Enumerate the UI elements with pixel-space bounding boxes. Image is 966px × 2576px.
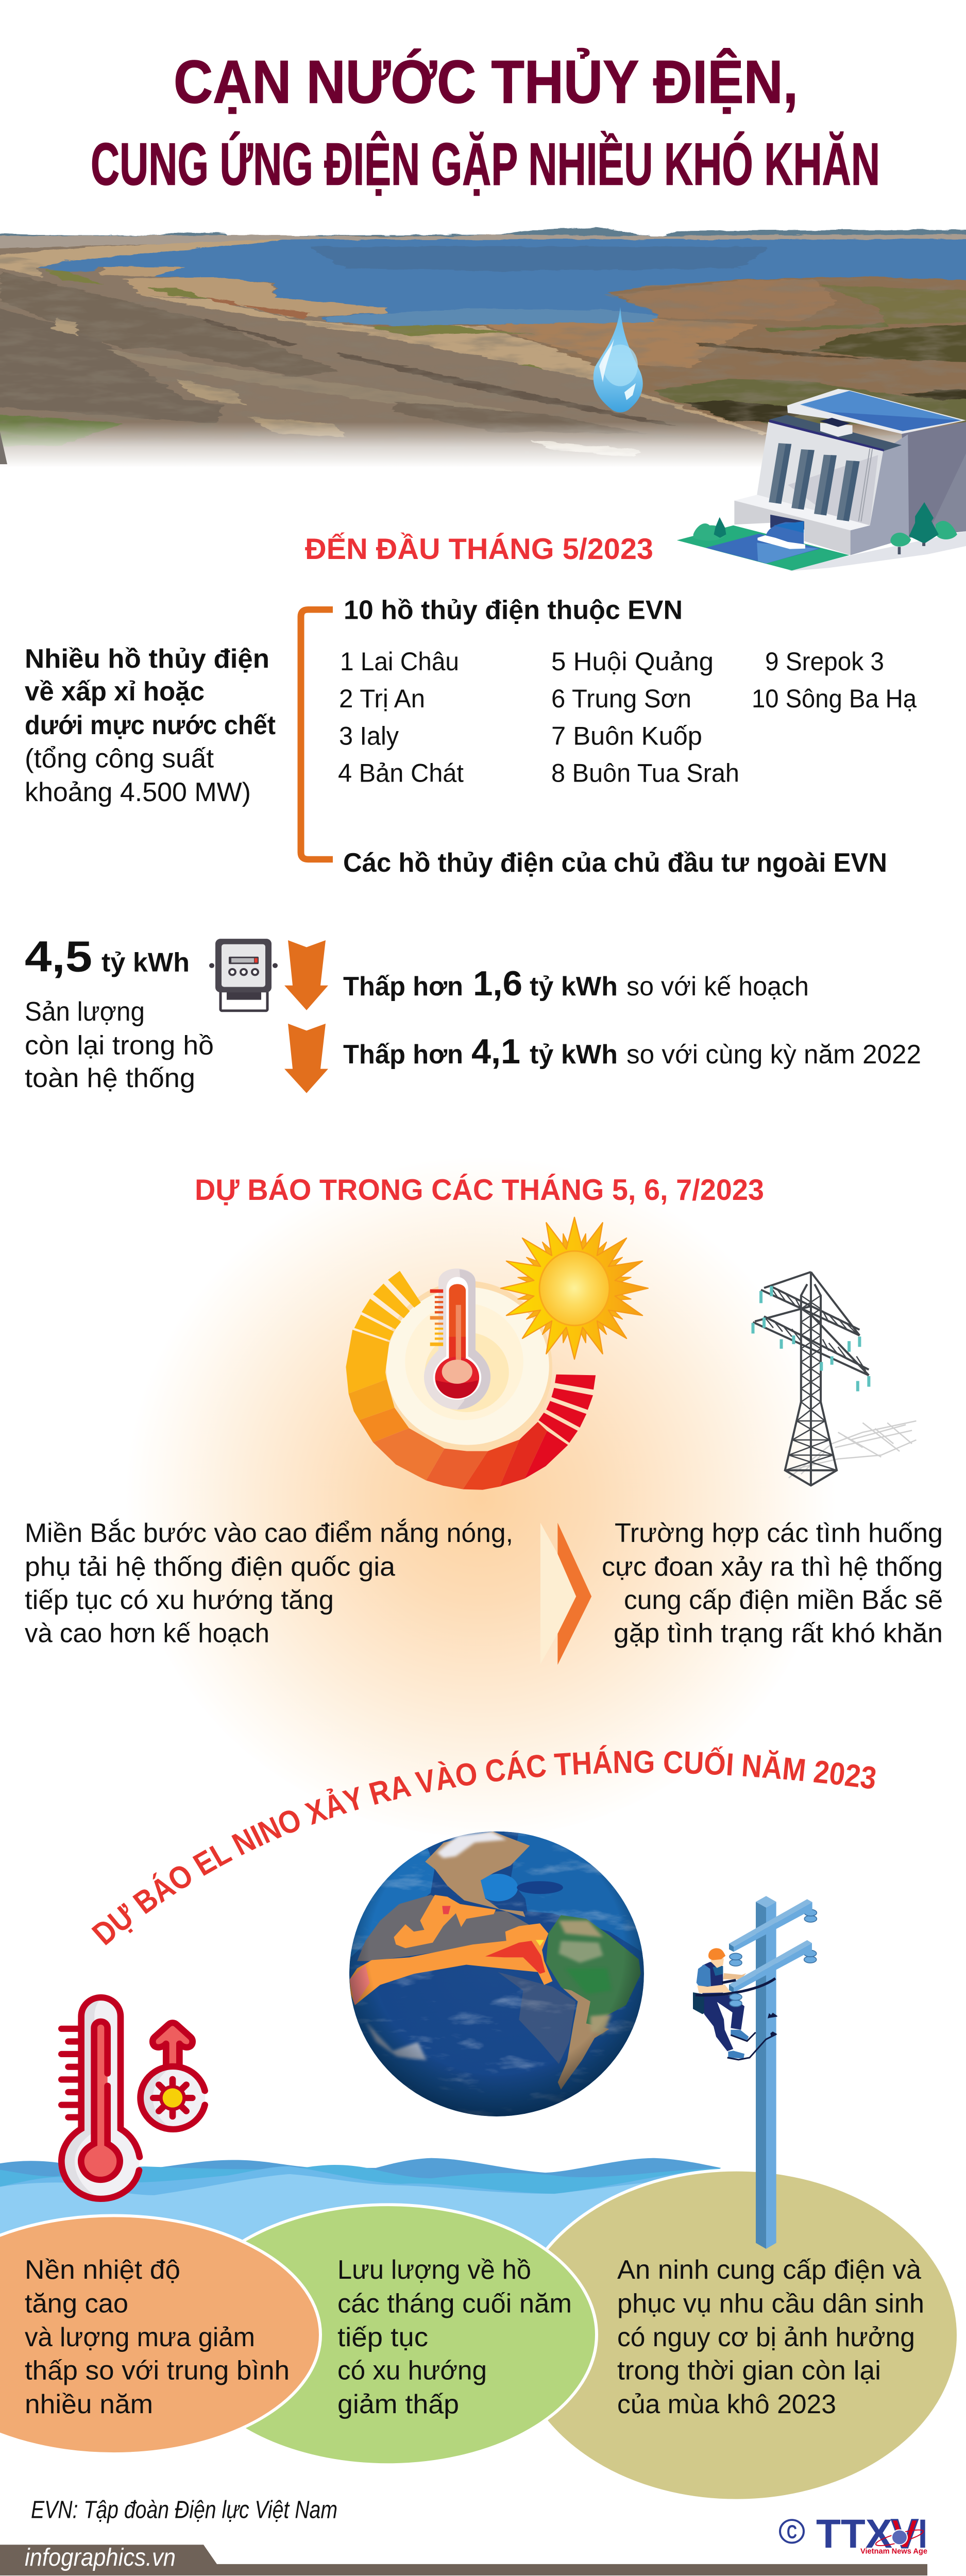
arrow: down 2 [284, 1024, 328, 1093]
text: power security: phục vụ nhu cầu dân sinh [617, 2289, 924, 2318]
icon: heat gauge with thermometer [346, 1268, 596, 1490]
icon: utility pole with worker [693, 1896, 817, 2249]
list of reservoirs: 8 Buôn Tua Srah [551, 758, 739, 787]
text: lower by 4.1: 4,1 [471, 1032, 520, 1071]
text: temperature and rainfall: Nền nhiệt độ [25, 2255, 180, 2285]
list of reservoirs: 4 Bản Chát [338, 758, 464, 787]
text: extreme situations: cực đoan xảy ra thì hệ thống [602, 1552, 943, 1582]
heading: 10 EVN reservoirs: 10 hồ thủy điện thuộc EVN [344, 595, 683, 625]
logo: TTXVN copyright: Vietnam News Age [860, 2548, 927, 2556]
text: inflow to reservoirs [337, 2255, 572, 2419]
list of reservoirs: 2 Trị An [339, 684, 425, 713]
panel: green ellipse inflow [179, 2205, 597, 2465]
text: power security: có nguy cơ bị ảnh hưởng [617, 2323, 915, 2352]
text: power security: trong thời gian còn lại [617, 2355, 881, 2385]
reservoir landscape photo illustration [0, 228, 966, 486]
text: many reservoirs near dead water level: (tổng công suất [25, 744, 214, 773]
list of reservoirs: 10 Sông Ba Hạ [752, 684, 917, 713]
text: northern peak heat [25, 1518, 513, 1648]
text: inflow to reservoirs: giảm thấp [337, 2389, 459, 2419]
text: inflow to reservoirs: các tháng cuối năm [337, 2289, 572, 2318]
text: lower by 1.6 [343, 964, 809, 1003]
orange heat glow background [125, 1151, 836, 1837]
arrow: down 1 [284, 940, 328, 1010]
text: power security: của mùa khô 2023 [617, 2389, 836, 2419]
text: lower by 1.6: Thấp hơn [343, 972, 463, 1002]
text: temperature and rainfall: nhiều năm [25, 2389, 153, 2419]
panel: orange ellipse temperature [0, 2215, 320, 2454]
text: extreme situations [602, 1518, 943, 1648]
logo: TTXVN copyright: C [787, 2521, 797, 2543]
list of reservoirs: 3 Ialy [339, 721, 399, 750]
list of reservoirs [338, 647, 917, 787]
text: power security [617, 2255, 924, 2419]
list of reservoirs: 7 Buôn Kuốp [551, 721, 702, 750]
logo: TTXVN copyright: I [918, 2511, 927, 2557]
text: northern peak heat: và cao hơn kế hoạch [25, 1618, 269, 1648]
logo: TTXVN copyright [780, 2511, 927, 2557]
title [91, 48, 880, 197]
text: lower by 1.6: 1,6 [473, 964, 522, 1003]
text: power security: An ninh cung cấp điện và [617, 2255, 922, 2285]
heading: non-EVN reservoirs: Các hồ thủy điện của chủ đầu tư ngoài EVN [343, 848, 887, 878]
text: many reservoirs near dead water level: về xấp xỉ hoặc [25, 676, 205, 706]
text: northern peak heat: phụ tải hệ thống điện quốc gia [25, 1552, 396, 1582]
list of reservoirs: 6 Trung Sơn [551, 684, 691, 713]
heading: forecast May June July 2023: DỰ BÁO TRONG CÁC THÁNG 5, 6, 7/2023 [195, 1173, 764, 1207]
text: temperature and rainfall: tăng cao [25, 2289, 128, 2318]
panel: khaki ellipse power security [514, 2170, 958, 2501]
list of reservoirs: 9 Srepok 3 [765, 647, 884, 676]
arrow: chevron [540, 1523, 591, 1665]
icon: water drop [594, 307, 643, 412]
heading: curved El Nino forecast: DỰ BÁO EL NINO XẢY RA VÀO CÁC THÁNG CUỐI NĂM 2023 [91, 1745, 876, 1945]
text: many reservoirs near dead water level: Nhiều hồ thủy điện [25, 644, 269, 674]
text: many reservoirs near dead water level: dưới mực nước chết [25, 710, 276, 740]
text: lower by 4.1: tỷ kWh [530, 1040, 618, 1070]
icon: sun [501, 1217, 648, 1359]
worker [693, 1948, 776, 2060]
text: inflow to reservoirs: tiếp tục [337, 2323, 428, 2352]
text: inflow to reservoirs: Lưu lượng về hồ [337, 2255, 531, 2285]
text: extreme situations: cung cấp điện miền Bắc sẽ [624, 1585, 943, 1615]
text: temperature and rainfall [25, 2255, 290, 2419]
text: lower by 4.1 [343, 1032, 921, 1071]
bracket [301, 609, 333, 859]
text: temperature and rainfall: và lượng mưa giảm [25, 2323, 255, 2352]
text: lower by 4.1: Thấp hơn [343, 1040, 463, 1070]
heading: early May 2023: ĐẾN ĐẦU THÁNG 5/2023 [305, 532, 653, 566]
source note: EVN: Tập đoàn Điện lực Việt Nam [31, 2496, 337, 2523]
stat: 4.5 billion kWh: tỷ kWh [101, 948, 190, 977]
title: CẠN NƯỚC THỦY ĐIỆN, [174, 48, 798, 116]
logo: TTXVN copyright: V [891, 2511, 918, 2557]
water waves [0, 2158, 721, 2276]
icon: electricity meter [209, 939, 278, 1011]
icon: thermometer with rising heat [61, 1997, 205, 2199]
stat: 4.5 billion kWh [25, 933, 214, 1093]
text: extreme situations: gặp tình trạng rất khó khăn [614, 1618, 943, 1648]
list of reservoirs: 5 Huội Quảng [551, 647, 714, 676]
text: northern peak heat: Miền Bắc bước vào cao điểm nắng nóng, [25, 1518, 513, 1548]
stat: 4.5 billion kWh: còn lại trong hồ [25, 1031, 214, 1060]
icon: transmission tower [753, 1272, 916, 1485]
text: lower by 1.6: tỷ kWh [530, 972, 618, 1002]
footer bar [0, 2544, 927, 2575]
text: temperature and rainfall: thấp so với trung bình [25, 2355, 290, 2385]
text: many reservoirs near dead water level: khoảng 4.500 MW) [25, 777, 251, 807]
stat: 4.5 billion kWh: toàn hệ thống [25, 1063, 195, 1093]
website label: infographics.vn [25, 2544, 176, 2571]
stat: 4.5 billion kWh: 4,5 [25, 933, 92, 981]
text: many reservoirs near dead water level [25, 644, 276, 807]
icon: earth globe with El Nino [349, 1831, 645, 2117]
stat: 4.5 billion kWh: Sản lượng [25, 997, 145, 1027]
text: lower by 4.1: so với cùng kỳ năm 2022 [626, 1040, 921, 1070]
text: northern peak heat: tiếp tục có xu hướng tăng [25, 1585, 334, 1615]
icon: hydropower dam building [677, 389, 966, 571]
text: lower by 1.6: so với kế hoạch [626, 972, 809, 1002]
white fade [0, 422, 966, 468]
logo: TTXVN copyright: TTX [816, 2511, 892, 2557]
text: inflow to reservoirs: có xu hướng [337, 2355, 487, 2385]
text: extreme situations: Trường hợp các tình huống [615, 1518, 943, 1548]
list of reservoirs: 1 Lai Châu [340, 647, 459, 676]
